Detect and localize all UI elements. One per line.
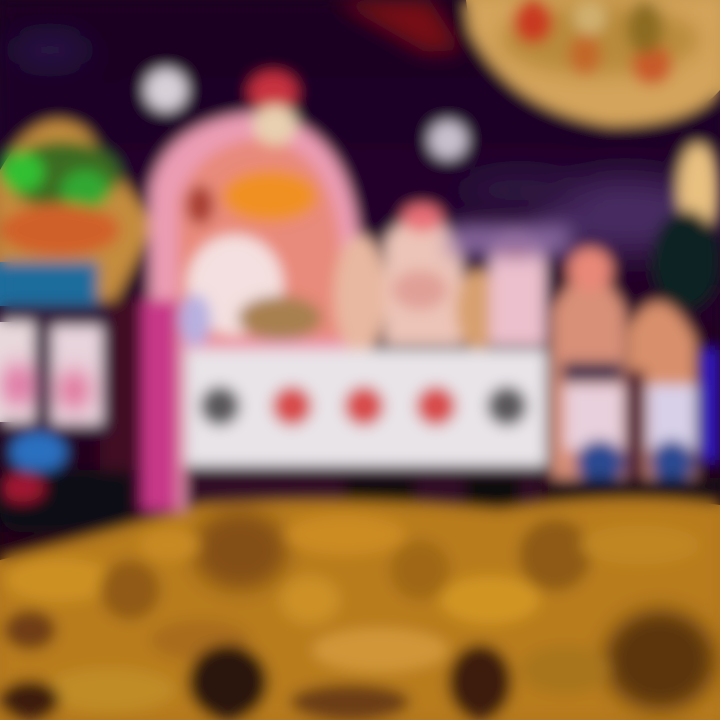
- reel symbol: red: [344, 386, 384, 426]
- chandelier: gold top right: [466, 0, 720, 236]
- reel panel with five cells: [186, 350, 546, 466]
- sparkle lights: [145, 69, 467, 159]
- red ceiling streak: [335, 0, 462, 52]
- base under centre machine: [190, 470, 540, 518]
- reel symbol: red: [272, 386, 312, 426]
- gold coin pile: [0, 499, 720, 720]
- centre slot machine: pink arch: [142, 72, 358, 510]
- left slot machine: [0, 121, 155, 532]
- reel symbol: red: [416, 386, 456, 426]
- reel symbol: grey: [200, 386, 240, 426]
- reel symbol: grey: [487, 386, 527, 426]
- peach machine row: [334, 204, 570, 355]
- right slot machines: [550, 210, 720, 508]
